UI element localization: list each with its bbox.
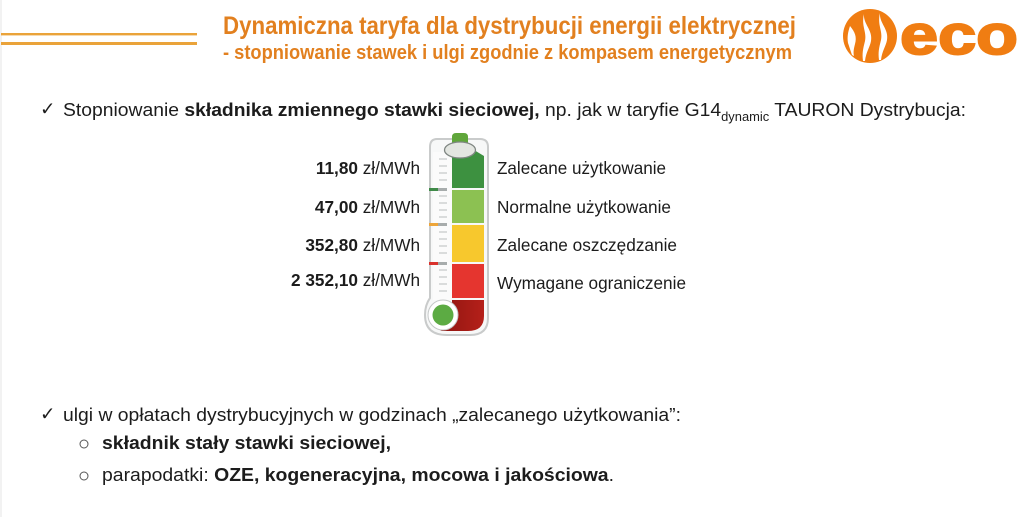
level: green bbox=[452, 150, 484, 188]
thermometer bulb bbox=[428, 300, 458, 330]
level: dark red bbox=[440, 300, 484, 331]
level: yellow bbox=[452, 225, 484, 262]
title: - stopniowanie stawek i ulgi zgodnie z kompasem energetycznym bbox=[223, 41, 792, 64]
marker: orange bbox=[429, 223, 447, 226]
thermometer cap bbox=[452, 133, 468, 145]
price labels bbox=[291, 158, 420, 290]
price labels: 352,80 zł/MWh bbox=[305, 235, 420, 255]
icon: eco logo: eco bbox=[900, 3, 1018, 66]
sub-bullet: surcharges: parapodatki: OZE, kogeneracyjna, mocowa i jakościowa . bbox=[102, 464, 614, 485]
bullet: network rate tiers bbox=[40, 98, 966, 124]
icon: thermometer bbox=[425, 133, 488, 335]
title: Dynamiczna taryfa dla dystrybucji energii elektrycznej bbox=[223, 12, 796, 40]
bullet: distribution relief: ulgi w opłatach dystrybucyjnych w godzinach „zalecanego użytkowania”: bbox=[63, 404, 681, 425]
level labels bbox=[497, 158, 686, 293]
level labels: Wymagane ograniczenie bbox=[497, 273, 686, 293]
scale ticks bbox=[439, 159, 447, 291]
price labels: 11,80 zł/MWh bbox=[316, 158, 420, 178]
sub-bullet: fixed component: składnik stały stawki sieciowej, bbox=[102, 432, 391, 453]
title bbox=[223, 12, 796, 64]
bullet: network rate tiers: TAURON Dystrybucja: bbox=[769, 99, 966, 120]
bullet: network rate tiers: Stopniowanie składnika zmiennego stawki sieciowej, np. jak w taryfie G14 bbox=[63, 99, 715, 120]
marker: green bbox=[429, 188, 447, 191]
bullet: network rate tiers: ✓ bbox=[40, 98, 56, 119]
inner tube bbox=[433, 152, 452, 300]
level labels: Normalne użytkowanie bbox=[497, 197, 671, 217]
level labels: Zalecane użytkowanie bbox=[497, 158, 666, 178]
thermometer knob bbox=[444, 142, 476, 158]
bullet: network rate tiers: dynamic bbox=[721, 110, 769, 124]
marker: red bbox=[429, 262, 447, 265]
bullet: distribution relief: ✓ bbox=[40, 403, 56, 424]
icon: eco logo bbox=[843, 3, 1018, 66]
level: light green bbox=[452, 190, 484, 223]
decorative double line bbox=[1, 33, 197, 45]
level: red bbox=[452, 264, 484, 298]
level labels: Zalecane oszczędzanie bbox=[497, 235, 677, 255]
price labels: 2 352,10 zł/MWh bbox=[291, 270, 420, 290]
thermometer casing bbox=[425, 139, 488, 335]
price labels: 47,00 zł/MWh bbox=[315, 197, 420, 217]
